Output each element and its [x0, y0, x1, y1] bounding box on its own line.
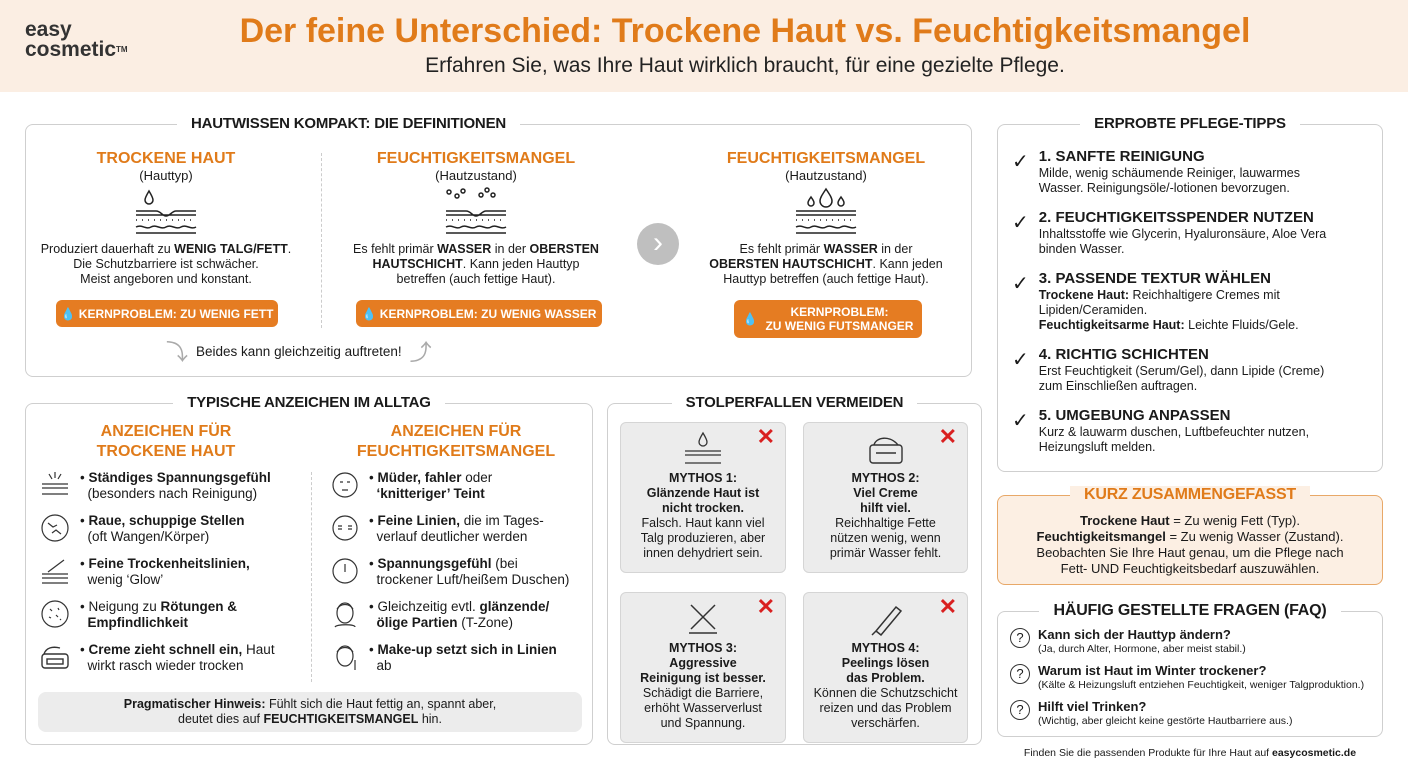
- tip 2: [1012, 209, 1326, 256]
- card: mythos 1: Talg produzieren, aber: [641, 531, 765, 545]
- list: feuchtigkeitsmangel: • Müder, fahler oder: [369, 470, 492, 485]
- panel: definitions: [25, 124, 972, 377]
- card: mythos 4: [803, 592, 968, 743]
- tip 1: ✓︎: [1012, 151, 1029, 173]
- card: mythos 3: [620, 592, 786, 743]
- card: mythos 2: nützen wenig, wenn: [830, 531, 941, 545]
- card: mythos 4: Können die Schutzschicht: [814, 686, 957, 700]
- heading: feuchtigkeitsmangel: ANZEICHEN FÜR: [391, 423, 521, 440]
- definition: repeated: OBERSTEN HAUTSCHICHT. Kann jeden: [709, 257, 943, 271]
- tip 4: 4. RICHTIG SCHICHTEN: [1039, 346, 1209, 363]
- tip 2: 2. FEUCHTIGKEITSSPENDER NUTZEN: [1039, 209, 1314, 226]
- card: mythos 2: hilft viel.: [860, 501, 911, 515]
- pill: kernproblem wasser: [356, 300, 602, 327]
- card: mythos 4: Peelings lösen: [842, 656, 929, 670]
- card: mythos 2: primär Wasser fehlt.: [830, 546, 941, 560]
- pill: kernproblem 3: KERNPROBLEM:: [790, 305, 888, 319]
- callout: hinweis: Pragmatischer Hinweis: Fühlt sich die Haut fettig an, spannt aber,: [124, 697, 496, 711]
- list: trockene haut: • Neigung zu Rötungen &: [80, 599, 237, 614]
- definition: trockene haut: TROCKENE HAUT: [97, 150, 235, 167]
- tip 1: Wasser. Reinigungsöle/-lotionen bevorzugen.: [1039, 181, 1290, 195]
- card: mythos 2: ✕: [939, 424, 957, 449]
- panel: faq: [997, 611, 1383, 737]
- heading: trockene haut: TROCKENE HAUT: [97, 443, 235, 460]
- tip 5: [1012, 407, 1309, 454]
- faq items: (Ja, durch Alter, Hormone, aber meist stabil.): [1038, 643, 1246, 655]
- pill: kernproblem 3: ZU WENIG FUTSMANGER: [765, 319, 913, 333]
- card: mythos 3: ✕: [757, 594, 775, 619]
- list: trockene haut: wirkt rasch wieder trocken: [88, 658, 244, 673]
- card: mythos 2: [803, 422, 968, 573]
- tip 5: Kurz & lauwarm duschen, Luftbefeuchter nutzen,: [1039, 425, 1309, 439]
- definition: repeated: FEUCHTIGKEITSMANGEL: [727, 150, 925, 167]
- tip 5: ✓: [1012, 410, 1029, 432]
- list: feuchtigkeitsmangel: ab: [376, 658, 392, 673]
- faq items: ?: [1016, 702, 1024, 717]
- card: mythos 1: Glänzende Haut ist: [647, 486, 759, 500]
- logo: cosmeticTM: [25, 38, 128, 61]
- list: feuchtigkeitsmangel: • Spannungsgefühl (bei: [369, 556, 518, 571]
- faq items: Kann sich der Hauttyp ändern?: [1038, 627, 1231, 642]
- list: trockene haut: Empfindlichkeit: [88, 615, 188, 630]
- card: mythos 3: Reinigung ist besser.: [640, 671, 766, 685]
- note: beides: Beides kann gleichzeitig auftreten!: [196, 344, 402, 358]
- list: trockene haut: • Ständiges Spannungsgefühl: [80, 470, 271, 485]
- tip 3: [1012, 270, 1299, 332]
- definition: repeated: Es fehlt primär WASSER in der: [740, 242, 912, 256]
- text: HAUTWISSEN KOMPAKT: DIE DEFINITIONEN: [191, 115, 506, 132]
- note: beides: [166, 340, 432, 365]
- definition: trockene haut: Meist angeboren und konstant.: [80, 272, 252, 286]
- card: mythos 1: ✕: [757, 424, 775, 449]
- tip 2: binden Wasser.: [1039, 242, 1124, 256]
- tip 4: zum Einschließen auftragen.: [1039, 379, 1197, 393]
- list: trockene haut: • Creme zieht schnell ein, Haut: [80, 642, 275, 657]
- arrow: circle next: [637, 223, 679, 265]
- list: trockene haut: (oft Wangen/Körper): [88, 529, 209, 544]
- panel: kurz zusammengefasst: Feuchtigkeitsmangel = Zu wenig Wasser (Zustand).: [1037, 529, 1343, 544]
- text: STOLPERFALLEN VERMEIDEN: [686, 394, 903, 411]
- faq items: ?: [1016, 630, 1024, 645]
- definition: feuchtigkeitsmangel: HAUTSCHICHT. Kann jeden Hauttyp: [372, 257, 580, 271]
- tip 3: Lipiden/Ceramiden.: [1039, 303, 1147, 317]
- heading: feuchtigkeitsmangel: FEUCHTIGKEITSMANGEL: [357, 443, 555, 460]
- pill: kernproblem wasser: 💧 KERNPROBLEM: ZU WENIG WASSER: [362, 306, 596, 320]
- card: mythos 1: MYTHOS 1:: [669, 471, 737, 485]
- list: feuchtigkeitsmangel: verlauf deutlicher werden: [376, 529, 527, 544]
- heading: feuchtigkeitsmangel: [357, 422, 555, 460]
- tip 3: 3. PASSENDE TEXTUR WÄHLEN: [1039, 270, 1271, 287]
- definition: repeated: [709, 150, 943, 286]
- definition: trockene haut: (Hauttyp): [139, 168, 193, 183]
- panel: kurz zusammengefasst: [997, 495, 1383, 585]
- callout: hinweis: deutet dies auf FEUCHTIGKEITSMANGEL hin.: [178, 712, 442, 726]
- tip 4: Erst Feuchtigkeit (Serum/Gel), dann Lipide (Creme): [1039, 364, 1324, 378]
- tip 4: [1012, 346, 1324, 393]
- card: mythos 3: und Spannung.: [661, 716, 745, 730]
- list: feuchtigkeitsmangel: ‘knitteriger’ Teint: [377, 486, 485, 501]
- list: feuchtigkeitsmangel: [332, 470, 569, 673]
- pill: kernproblem fett: [56, 300, 278, 327]
- title: Der feine Unterschied: Trockene Haut vs. Feuchtigkeitsmangel: [240, 12, 1250, 50]
- panel: kurz zusammengefasst: Beobachten Sie Ihre Haut genau, um die Pflege nach: [1036, 545, 1344, 560]
- list: feuchtigkeitsmangel: • Make-up setzt sich in Linien: [369, 642, 557, 657]
- list: feuchtigkeitsmangel: ölige Partien (T-Zone): [376, 615, 513, 630]
- faq items: (Kälte & Heizungsluft entziehen Feuchtigkeit, weniger Talgproduktion.): [1038, 679, 1364, 691]
- pill: kernproblem 3: 💧: [743, 312, 757, 326]
- card: mythos 1: innen dehydriert sein.: [643, 546, 763, 560]
- card: mythos 2: Reichhaltige Fette: [835, 516, 936, 530]
- note: beides: ⤵: [166, 340, 188, 365]
- tip 1: 1. SANFTE REINIGUNG: [1039, 148, 1205, 165]
- tip 3: Feuchtigkeitsarme Haut: Leichte Fluids/Gele.: [1039, 318, 1299, 332]
- card: mythos 4: MYTHOS 4:: [851, 641, 920, 655]
- definition: repeated: (Hautzustand): [785, 168, 867, 183]
- logo: [25, 18, 128, 61]
- text: HÄUFIG GESTELLTE FRAGEN (FAQ): [1053, 602, 1326, 619]
- tip 1: Milde, wenig schäumende Reiniger, lauwarmes: [1039, 166, 1300, 180]
- definition: feuchtigkeitsmangel: Es fehlt primär WASSER in der OBERSTEN: [353, 242, 599, 256]
- text: ERPROBTE PFLEGE-TIPPS: [1094, 115, 1286, 132]
- panel: kurz zusammengefasst: Fett- UND Feuchtigkeitsbedarf auszuwählen.: [1061, 561, 1319, 576]
- definition: repeated: Hauttyp betreffen (auch fettige Haut).: [723, 272, 929, 286]
- heading: trockene haut: [96, 422, 236, 460]
- list: feuchtigkeitsmangel: • Feine Linien, die im Tages-: [369, 513, 544, 528]
- card: mythos 3: Schädigt die Barriere,: [643, 686, 763, 700]
- list: feuchtigkeitsmangel: • Gleichzeitig evtl. glänzende/: [369, 599, 549, 614]
- card: mythos 4: reizen und das Problem: [819, 701, 952, 715]
- card: mythos 2: MYTHOS 2:: [851, 471, 920, 485]
- faq items: (Wichtig, aber gleicht keine gestörte Hautbarriere aus.): [1038, 715, 1292, 727]
- card: mythos 3: erhöht Wasserverlust: [644, 701, 762, 715]
- card: mythos 4: ✕: [939, 594, 957, 619]
- definition: feuchtigkeitsmangel: FEUCHTIGKEITSMANGEL: [377, 150, 575, 167]
- tip 5: 5. UMGEBUNG ANPASSEN: [1039, 407, 1230, 424]
- panel: stolperfallen: [607, 403, 982, 745]
- tip 3: Trockene Haut: Reichhaltigere Cremes mit: [1039, 288, 1280, 302]
- tip 5: Heizungsluft melden.: [1039, 440, 1156, 454]
- list: trockene haut: [41, 470, 275, 673]
- callout: hinweis: [38, 692, 582, 732]
- tip 4: ✓: [1012, 349, 1029, 371]
- definition: feuchtigkeitsmangel: [353, 150, 599, 286]
- heading: trockene haut: ANZEICHEN FÜR: [101, 423, 231, 440]
- card: mythos 3: MYTHOS 3:: [669, 641, 737, 655]
- tip 3: ✓: [1012, 273, 1029, 295]
- panel: anzeichen: [25, 403, 593, 745]
- subtitle: Erfahren Sie, was Ihre Haut wirklich braucht, für eine gezielte Pflege.: [425, 54, 1065, 77]
- card: mythos 2: Viel Creme: [853, 486, 918, 500]
- tip 2: Inhaltsstoffe wie Glycerin, Hyaluronsäure, Aloe Vera: [1039, 227, 1326, 241]
- arrow: circle next: ›: [653, 226, 663, 259]
- faq items: ?: [1016, 666, 1024, 681]
- panel: kurz zusammengefasst: Trockene Haut = Zu wenig Fett (Typ).: [1080, 513, 1300, 528]
- list: feuchtigkeitsmangel: trockener Luft/heißem Duschen): [376, 572, 569, 587]
- list: trockene haut: • Raue, schuppige Stellen: [80, 513, 245, 528]
- tip 2: ✓: [1012, 212, 1029, 234]
- list: trockene haut: (besonders nach Reinigung): [88, 486, 257, 501]
- definition: feuchtigkeitsmangel: betreffen (auch fettige Haut).: [397, 272, 555, 286]
- definition: trockene haut: [41, 150, 291, 286]
- pill: kernproblem fett: 💧 KERNPROBLEM: ZU WENIG FETT: [61, 306, 273, 320]
- list: trockene haut: • Feine Trockenheitslinien,: [80, 556, 250, 571]
- faq items: Warum ist Haut im Winter trockener?: [1038, 663, 1266, 678]
- card: mythos 1: [620, 422, 786, 573]
- card: mythos 1: Falsch. Haut kann viel: [642, 516, 764, 530]
- panel: pflege-tipps: [997, 124, 1383, 472]
- faq items: Hilft viel Trinken?: [1038, 699, 1146, 714]
- definition: trockene haut: Produziert dauerhaft zu WENIG TALG/FETT.: [41, 242, 291, 256]
- header band: [0, 0, 1408, 92]
- list: trockene haut: wenig ‘Glow’: [88, 572, 163, 587]
- card: mythos 4: das Problem.: [846, 671, 925, 685]
- tip 1: [1012, 148, 1300, 195]
- definition: feuchtigkeitsmangel: (Hautzustand): [435, 168, 517, 183]
- text: TYPISCHE ANZEICHEN IM ALLTAG: [187, 394, 431, 411]
- definition: trockene haut: Die Schutzbarriere ist schwächer.: [73, 257, 259, 271]
- text: KURZ ZUSAMMENGEFASST: [1084, 486, 1296, 503]
- pill: kernproblem 3: [734, 300, 922, 338]
- note: beides: ⤴: [410, 340, 432, 365]
- card: mythos 4: verschärfen.: [851, 716, 920, 730]
- faq items: [1010, 627, 1364, 727]
- card: mythos 1: nicht trocken.: [662, 501, 744, 515]
- footer: Finden Sie die passenden Produkte für Ihre Haut auf easycosmetic.de: [1024, 747, 1356, 759]
- card: mythos 3: Aggressive: [669, 656, 737, 670]
- logo: easy: [25, 18, 72, 41]
